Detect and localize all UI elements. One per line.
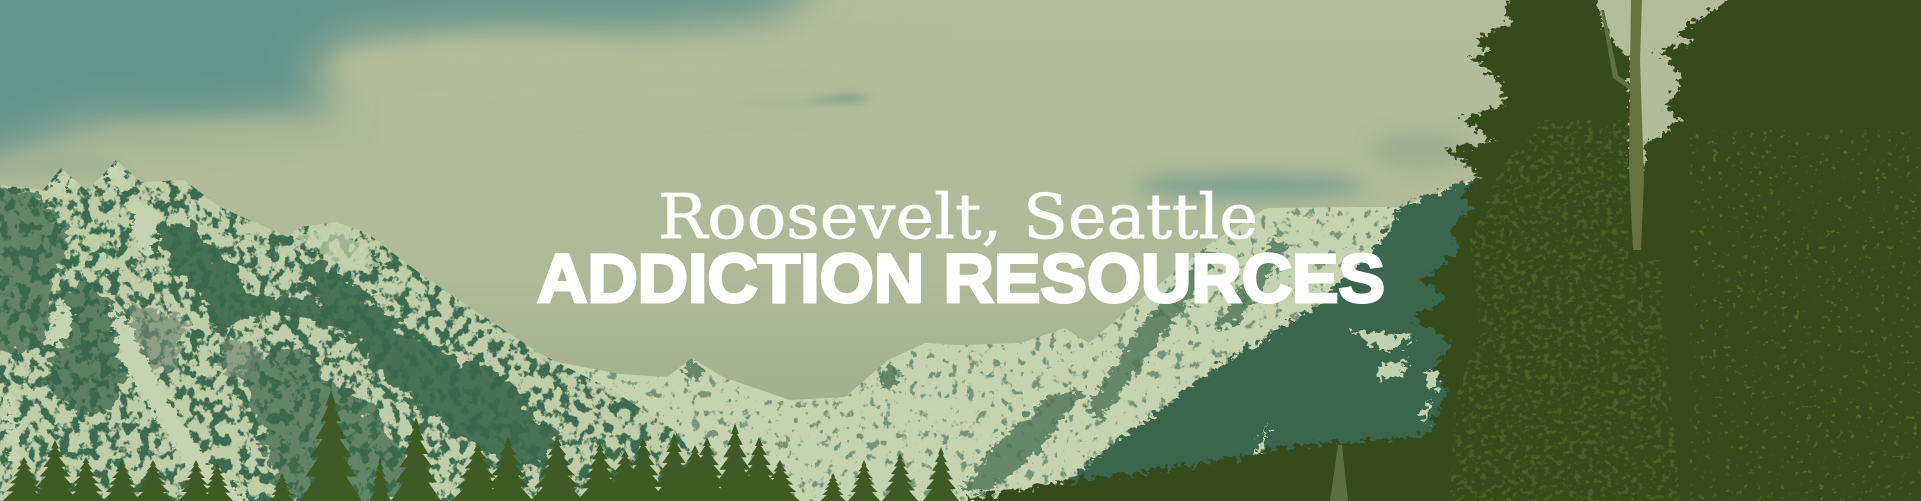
fir silhouette: [960, 0, 1921, 501]
left snow mountain: [0, 150, 730, 501]
title line: location: Roosevelt, Seattle: [658, 180, 1258, 253]
cloud streaks: [525, 81, 1470, 199]
title line: subject: ADDICTION RESOURCES: [537, 240, 1385, 317]
rock streaks on right ridge: [684, 240, 1290, 495]
sparse needles, far right: [1690, 130, 1921, 501]
center snow mountains: [550, 170, 1500, 501]
forest bands: [0, 185, 560, 501]
sunlit moss on middle tree: [1450, 120, 1680, 501]
right evergreen trees: [960, 0, 1921, 501]
grey rock faces: [130, 300, 265, 380]
teal open sky, upper left: [0, 0, 830, 170]
title: [537, 180, 1385, 317]
snow chutes: [5, 163, 385, 501]
pale cloud bank: [330, 40, 940, 115]
pale bare sapling: [1330, 445, 1348, 501]
dark right mountain flank: [1040, 180, 1500, 501]
bare trunk: [1629, 0, 1644, 250]
snow patches on flank: [1245, 330, 1440, 470]
broken snag branch: [1601, 10, 1630, 90]
foreground tree line: [2, 390, 959, 501]
